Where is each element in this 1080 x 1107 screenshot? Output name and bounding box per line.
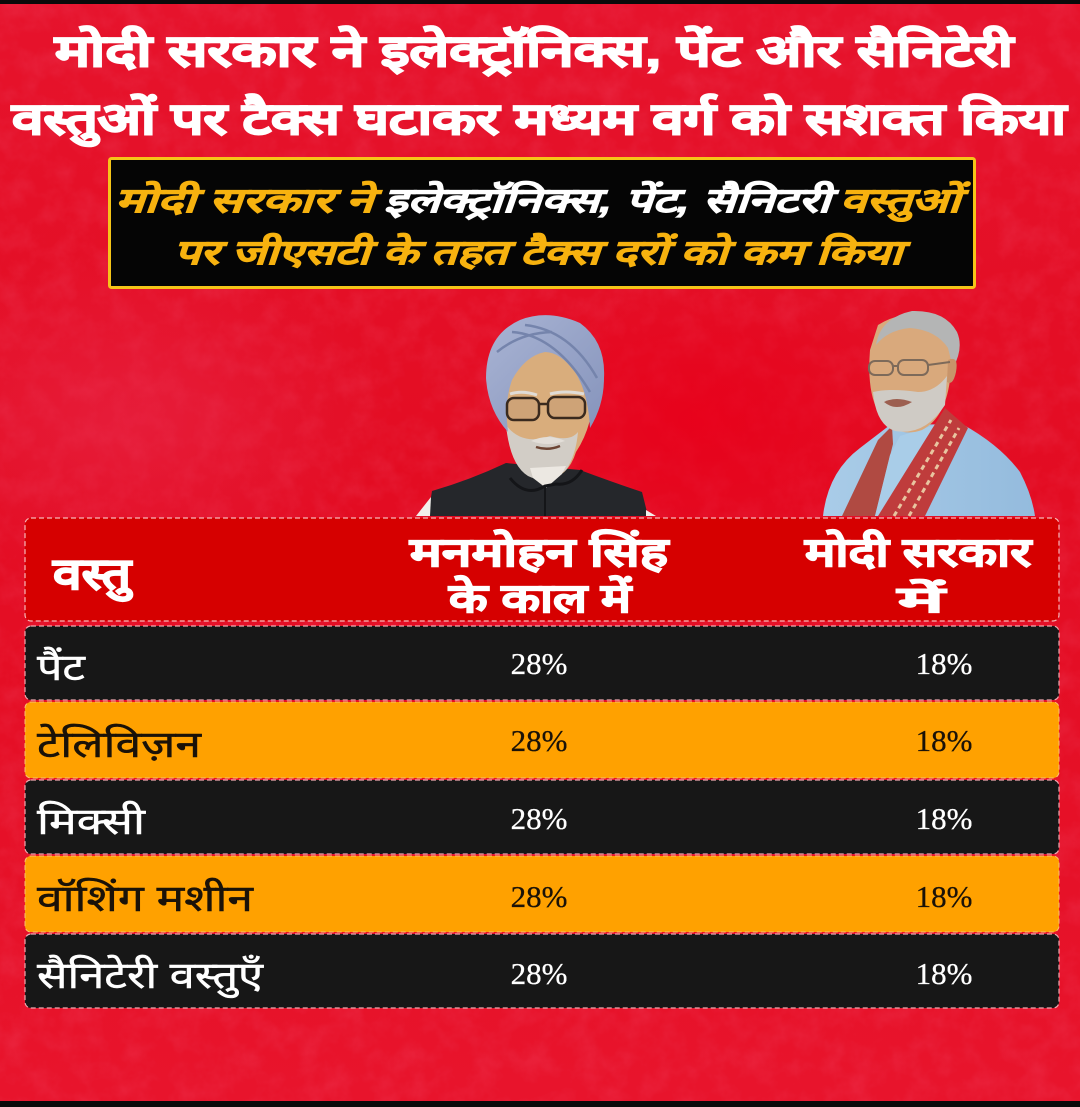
header: Modi government: [804, 529, 1033, 620]
table row: washing machine: [25, 856, 1059, 932]
header: Manmohan Singh era: मनमोहन सिंह: [409, 529, 670, 575]
callout line 1: [115, 180, 971, 222]
table row: washing machine: 18%: [916, 879, 972, 914]
header: Manmohan Singh era: के काल में: [448, 575, 634, 621]
table row: television: 28%: [511, 723, 567, 758]
table row: sanitary items: 18%: [916, 956, 972, 991]
table row: television: [25, 702, 1059, 778]
title: मोदी सरकार ने इलेक्ट्रॉनिक्स, पेंट और सैनिटेरी: [54, 25, 1015, 77]
table row: sanitary items: सैनिटेरी वस्तुएँ: [37, 954, 265, 998]
callout line 1: इलेक्ट्रॉनिक्स, पेंट, सैनिटरी: [384, 180, 840, 220]
title: वस्तुओं पर टैक्स घटाकर मध्यम वर्ग को सशक्त किया: [11, 93, 1068, 147]
table row: sanitary items: [25, 934, 1059, 1008]
table row: television: 18%: [916, 723, 972, 758]
table row: mixer: 28%: [511, 801, 567, 836]
callout line 1: मोदी सरकार ने: [115, 180, 383, 220]
header: Modi government: मोदी सरकार: [804, 529, 1033, 575]
table row: paint: 18%: [916, 646, 972, 681]
table row: television: टेलिविज़न: [37, 723, 203, 765]
callout line 2: पर जीएसटी के तहत टैक्स दरों को कम किया: [174, 232, 912, 272]
header: Modi government: में: [896, 579, 947, 620]
title: [11, 25, 1068, 147]
portrait: Narendra Modi: [823, 311, 1035, 516]
callout: black banner with yellow border: [110, 158, 974, 288]
table row: mixer: 18%: [916, 801, 972, 836]
table row: mixer: मिक्सी: [37, 800, 147, 842]
table row: washing machine: वॉशिंग मशीन: [37, 877, 255, 919]
callout line 1: वस्तुओं: [840, 180, 971, 222]
table row: paint: [25, 626, 1059, 700]
portrait: Manmohan Singh: [416, 315, 656, 516]
table row: mixer: [25, 780, 1059, 854]
table header row: [25, 518, 1059, 621]
table row: paint: 28%: [511, 646, 567, 681]
header: Manmohan Singh era: [409, 529, 670, 621]
table row: sanitary items: 28%: [511, 956, 567, 991]
header: item: वस्तु: [52, 550, 133, 602]
table row: washing machine: 28%: [511, 879, 567, 914]
table row: paint: पैंट: [37, 646, 87, 688]
